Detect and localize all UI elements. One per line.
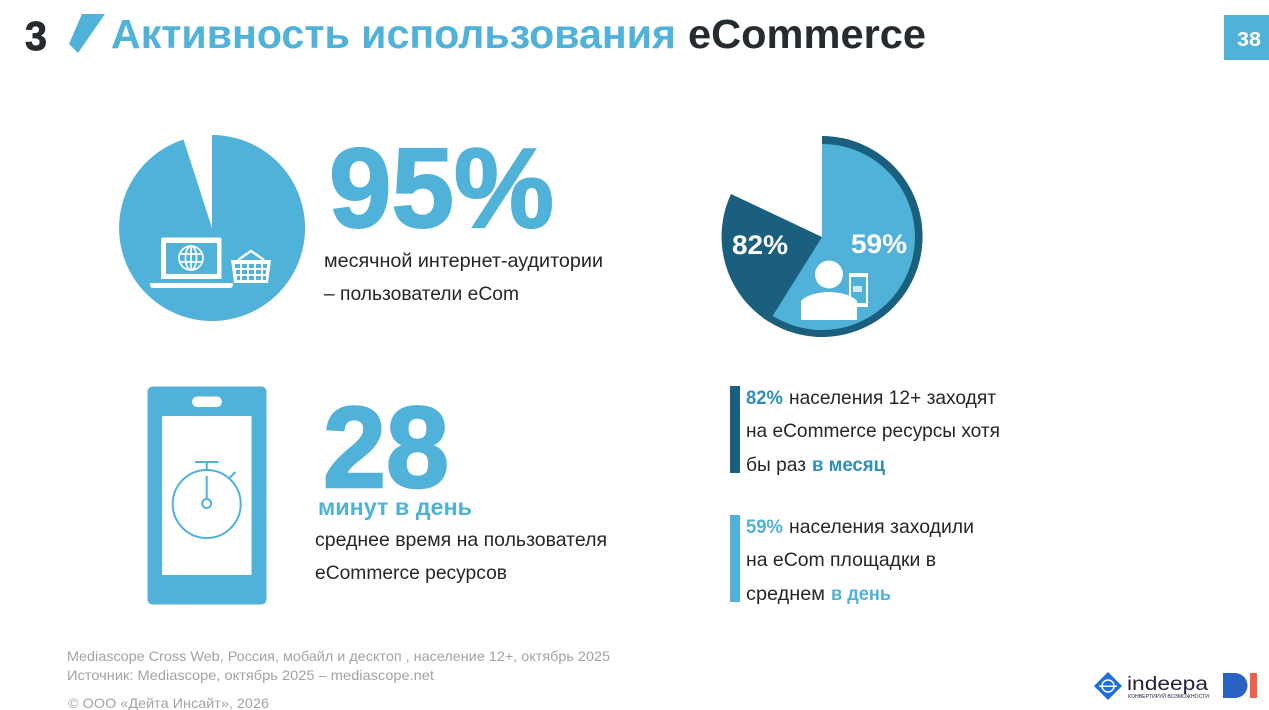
label 82%: 82%: [732, 230, 788, 260]
title blue part: Активность использования: [111, 11, 676, 57]
pie chart: 95%: [119, 135, 305, 321]
callout: 59%: среднем: [746, 583, 825, 605]
logo: indeepa: КОНВЕРТИРУЙ ВОЗМОЖНОСТИ: [1128, 692, 1209, 700]
icon: slash accent: [69, 14, 105, 53]
stat unit: minutes per day: минут в день: [318, 494, 472, 520]
icon: user with phone: [801, 260, 868, 320]
text: 28 description: среднее время на пользователя: [315, 529, 607, 551]
icon: shopping basket: [231, 251, 271, 283]
callout: 59%: в день: [831, 584, 891, 605]
callout: 59%: населения заходили: [789, 516, 974, 538]
page number badge: [1224, 15, 1269, 60]
label 59%: 59%: [851, 229, 907, 259]
text: 95% description: [324, 250, 603, 305]
title dark part: eCommerce: [688, 11, 926, 57]
callout: 59%: [730, 515, 974, 605]
source note: Источник: Mediascope, октябрь 2025 – mediascope.net: [67, 667, 434, 683]
icon: smartphone with stopwatch: [148, 386, 266, 604]
text: 95% description: – пользователи eCom: [324, 283, 519, 305]
stat: 95%: 95%: [329, 125, 554, 251]
callout: 82%: в месяц: [812, 455, 885, 476]
callout: 59%: на eCom площадки в: [746, 549, 936, 571]
callout: 82%: 82%: [746, 388, 783, 409]
callout: 82%: населения 12+ заходят: [789, 387, 996, 409]
text: 28 description: eCommerce ресурсов: [315, 562, 507, 584]
source note: Mediascope Cross Web, Россия, мобайл и десктоп , население 12+, октябрь 2025: [67, 648, 610, 664]
icon: stopwatch: [173, 462, 241, 538]
source note: [67, 648, 610, 683]
logo: indeepa: [1094, 672, 1209, 700]
icon: laptop with globe: [150, 238, 233, 288]
callout: 82%: [730, 386, 1000, 476]
logo: indeepa: indeepa: [1127, 674, 1209, 695]
callout: 82%: бы раз: [746, 454, 806, 476]
logo: DI: [1223, 673, 1257, 698]
callout: 59%: 59%: [746, 517, 783, 538]
title: [25, 11, 926, 59]
callout: 82%: на eCommerce ресурсы хотя: [746, 420, 1000, 442]
section number: 3: [25, 13, 47, 59]
pie chart: 82% and 59%: [722, 136, 923, 337]
page number badge: 38: [1237, 29, 1261, 51]
text: 28 description: [315, 529, 607, 584]
stat: 28: 28: [323, 384, 449, 512]
text: 95% description: месячной интернет-аудитории: [324, 250, 603, 272]
